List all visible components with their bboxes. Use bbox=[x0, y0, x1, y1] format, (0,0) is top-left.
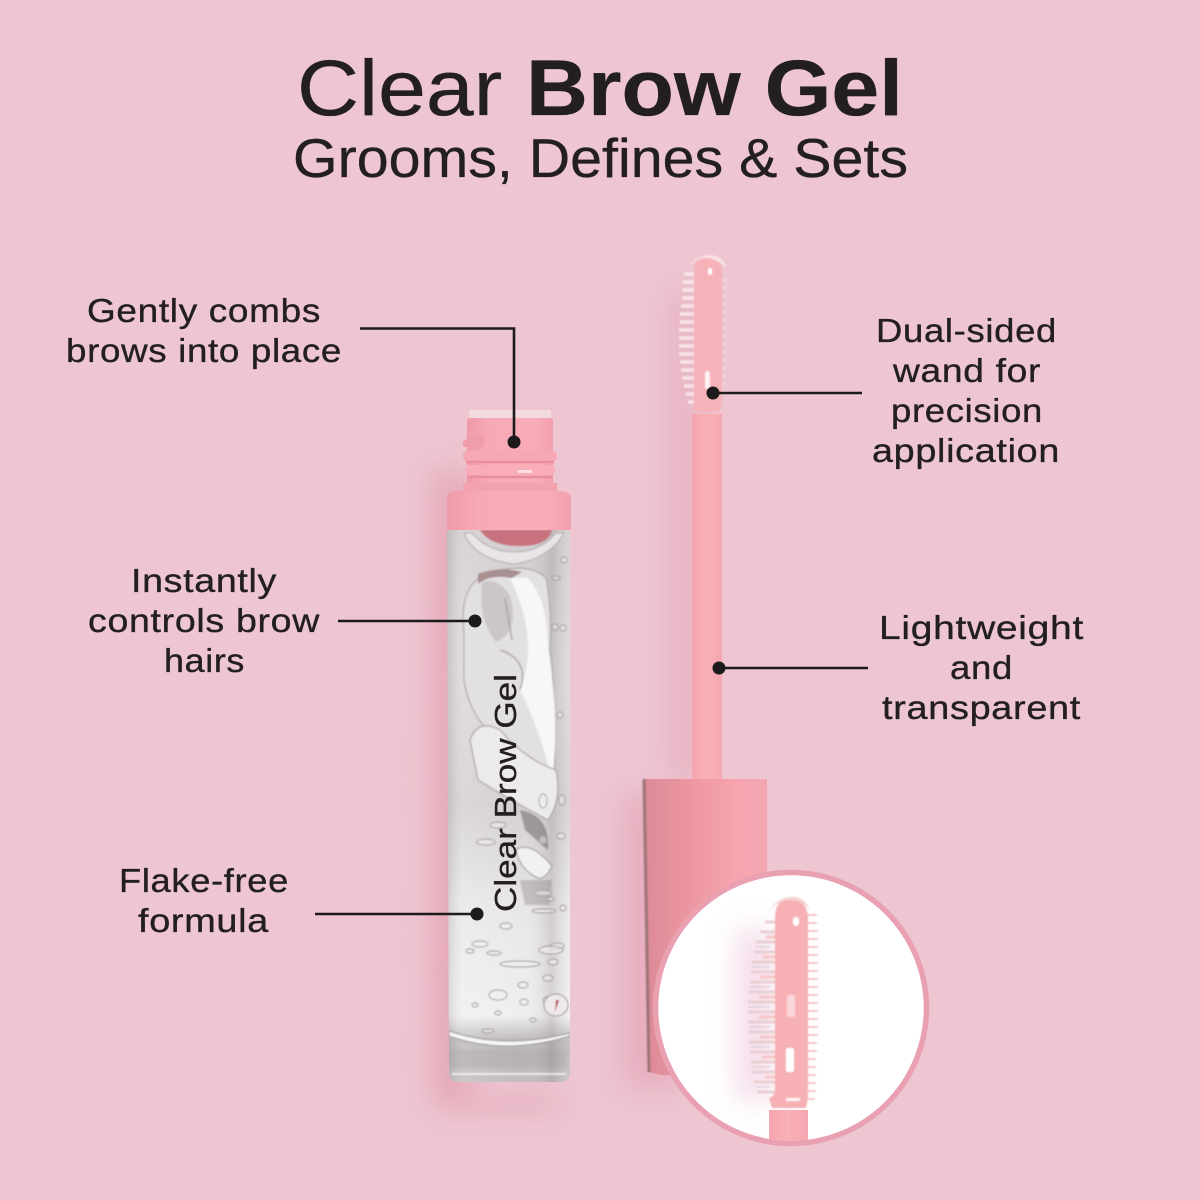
wand bbox=[644, 255, 767, 1075]
brush core bbox=[769, 899, 808, 1108]
wand brush core bbox=[694, 257, 722, 412]
callout text: flake-free: Flake-free bbox=[119, 862, 289, 899]
callout text: lightweight: and bbox=[950, 649, 1013, 686]
lower gel swirl bbox=[470, 726, 558, 820]
brush tip crown bbox=[688, 255, 726, 268]
soft shadow bbox=[738, 930, 770, 1100]
bubbles bbox=[466, 557, 567, 1033]
callout text: dual-sided wand: Dual-sided bbox=[876, 312, 1057, 349]
circle fill and border bbox=[656, 872, 926, 1144]
leader lines bbox=[315, 328, 868, 914]
bottle collar bbox=[447, 491, 571, 530]
close-up circle bbox=[656, 872, 926, 1150]
bottle label: Clear Brow Gel bbox=[488, 674, 523, 912]
subtitle: Grooms, Defines & Sets bbox=[293, 127, 908, 189]
pink reflection bbox=[480, 530, 552, 546]
callout text: combs: brows into place bbox=[66, 332, 342, 369]
brush crown bbox=[770, 896, 810, 910]
dots bbox=[468, 386, 726, 920]
callout text: dual-sided wand: wand for bbox=[892, 352, 1041, 389]
bottle top rim bbox=[470, 411, 550, 423]
brush stem bbox=[769, 1110, 808, 1141]
callout text: lightweight: transparent bbox=[882, 689, 1081, 726]
bottle bbox=[447, 411, 571, 1082]
highlights bbox=[793, 917, 799, 926]
wand and cap shadow bbox=[622, 290, 696, 1090]
left bristles bbox=[748, 922, 776, 1092]
wand bristles bbox=[679, 274, 727, 402]
wand cap bbox=[644, 779, 767, 1075]
wand stem bbox=[692, 414, 722, 779]
red fleck bubble bbox=[544, 994, 568, 1016]
callout text: controls: controls brow bbox=[88, 602, 320, 639]
bottle shadow bbox=[430, 470, 560, 1110]
callout text: combs: Gently combs bbox=[87, 292, 321, 329]
callout text: dual-sided wand: application bbox=[872, 432, 1060, 469]
callout text: controls bbox=[88, 562, 320, 679]
bottle neck with threads bbox=[463, 418, 557, 492]
callout text: flake-free: formula bbox=[138, 902, 269, 939]
callout text: combs bbox=[66, 292, 342, 369]
large gel swirl bbox=[463, 568, 555, 790]
callout text: dual-sided wand: precision bbox=[891, 392, 1043, 429]
callout text: lightweight bbox=[879, 609, 1084, 726]
callout text: controls: hairs bbox=[164, 642, 245, 679]
right bristles bbox=[806, 915, 818, 1099]
callout text: controls: Instantly bbox=[131, 562, 277, 599]
callout text: flake-free bbox=[119, 862, 289, 939]
callout text: dual-sided wand bbox=[872, 312, 1060, 469]
callout text: lightweight: Lightweight bbox=[879, 609, 1084, 646]
bottle thick base bbox=[449, 1031, 570, 1046]
title: Clear Brow Gel bbox=[297, 43, 903, 132]
glass body with gel bbox=[447, 530, 570, 1082]
